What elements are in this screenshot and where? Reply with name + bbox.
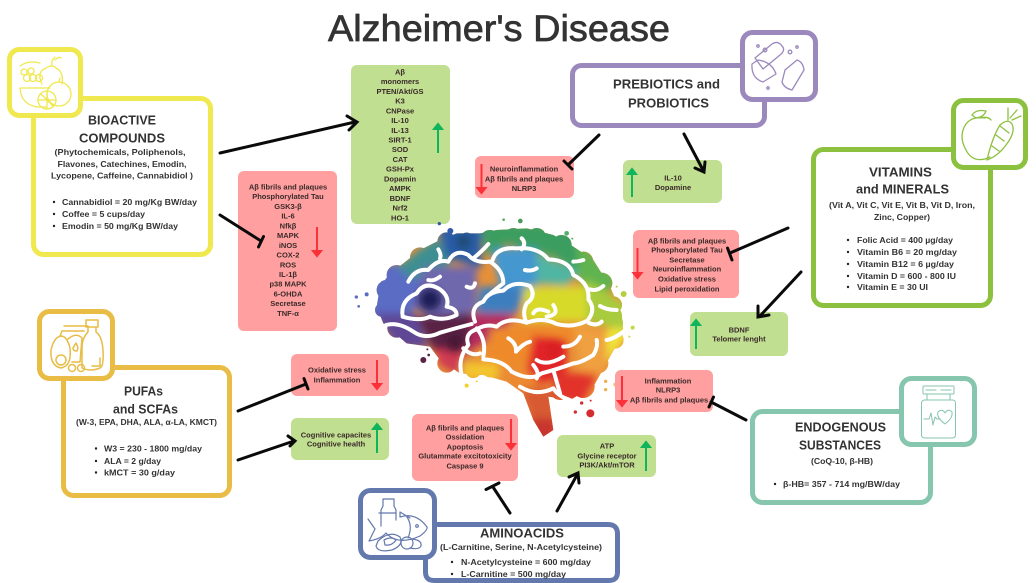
panel: prebiotics downregulated: NLRP3 [512,184,536,193]
panel: downregulated bioactive targets: Nfkβ [280,222,297,230]
arrow: bioactive to green panel [220,116,357,153]
panel: vitamins and minerals: Zinc, Copper) [874,212,930,222]
heading: ENDOGENOUS [795,420,886,434]
brain folds [386,238,623,400]
dosage list [53,197,197,231]
dosage list: N-Acetylcysteine = 600 mg/day [461,557,591,567]
panel: aminoacids downregulated [412,414,518,481]
panel: prebiotics downregulated [475,156,574,198]
heading: VITAMINS [869,164,932,180]
panel: upregulated bioactive targets: BDNF [390,194,411,203]
panel: downregulated bioactive targets: MAPK [277,231,300,240]
panel: aminoacids upregulated: PI3K/Akt/mTOR [579,460,635,470]
dosage list: Vitamin B12 = 6 µg/day [857,259,954,269]
panel: PUFAs downregulated [291,354,389,396]
subtitle: (CoQ-10, β-HB) [811,456,873,466]
icon: supplement jar [902,378,974,444]
panel: downregulated bioactive targets: IL-1β [279,270,297,279]
panel: downregulated bioactive targets: iNOS [279,241,297,250]
panel: vitamins downregulated [633,230,739,298]
arrow: down [634,248,642,278]
panel: PUFAs upregulated: Cognitive capacites [301,430,371,440]
panel: bioactive compounds [10,50,210,254]
panel: upregulated bioactive targets: monomers [381,77,419,86]
inhibition: endogenous to red panel [709,397,746,420]
panel: upregulated bioactive targets: SIRT-1 [388,136,412,144]
dosage list: Emodin = 50 mg/Kg BW/day [62,221,178,231]
panel: downregulated bioactive targets: 6-OHDA [274,290,303,298]
arrow: down [478,164,486,193]
arrow: up [373,424,381,453]
arrow: prebiotics to green panel [684,134,705,172]
panel: downregulated bioactive targets: p38 MAPK [269,280,307,288]
dosage list: Cannabidiol = 20 mg/Kg BW/day [62,197,197,207]
icon: fruit basket [10,50,80,116]
dosage list: Coffee = 5 cups/day [62,209,145,219]
panel: bioactive compounds: Lycopene, Caffeine, Cannabidiol ) [51,170,193,180]
panel: downregulated bioactive targets: IL-6 [281,212,295,220]
panel: prebiotics and probiotics [572,32,816,126]
arrow: down [618,376,626,406]
panel: bioactive compounds: Flavones, Catechines, Emodin, [58,159,186,169]
panel: downregulated bioactive targets: ROS [280,260,296,270]
panel: PUFAs upregulated [291,418,389,460]
panel: vitamins downregulated: Lipid peroxidation [654,284,720,294]
arrow: PUFAs to green panel [238,436,295,460]
dosage list [847,235,957,292]
panel: upregulated bioactive targets: Aβ [395,68,405,76]
panel: downregulated bioactive targets [238,171,337,331]
panel: aminoacids upregulated [557,435,656,477]
arrow: up [692,320,700,349]
panel: aminoacids downregulated: Apoptosis [447,442,483,452]
panel: upregulated bioactive targets: IL-10 [391,116,409,125]
panel: prebiotics downregulated: Aβ fibrils and plaques [485,174,563,184]
panel: endogenous downregulated: Inflammation [645,376,692,386]
dosage list: kMCT = 30 g/day [104,468,175,478]
inhibition: vitamins to red panel [728,228,788,260]
panel: vitamins upregulated: BDNF [729,326,750,334]
panel: upregulated bioactive targets: PTEN/Akt/GS [376,87,424,96]
dosage list: β-HB= 357 - 714 mg/BW/day [783,479,900,489]
arrow: down [373,360,381,389]
panel: PUFAs and SCFAs: and SCFAs [113,402,178,416]
arrow: up [642,442,650,471]
dosage list [95,444,202,478]
heading: BIOACTIVE [88,112,156,128]
panel: prebiotics upregulated: Dopamine [655,183,691,192]
arrow: down [507,419,515,449]
arrow: vitamins to green panel [758,272,801,317]
dosage list [451,557,591,579]
panel: endogenous substances: SUBSTANCES [799,438,881,452]
dosage list: W3 = 230 - 1800 mg/day [104,444,202,454]
panel: aminoacids downregulated: Aβ fibrils and plaques [426,424,504,432]
panel: vitamins downregulated: Aβ fibrils and plaques [648,236,726,246]
panel: aminoacids downregulated: Caspase 9 [446,462,484,470]
panel: vitamins downregulated: Oxidative stress [658,274,716,284]
panel: prebiotics and probiotics: PROBIOTICS [628,96,709,110]
subtitle: (Phytochemicals, Poliphenols, [54,147,186,157]
arrow: down [313,227,321,256]
inhibition: aminoacids to red panel [486,483,510,513]
panel: vitamins downregulated: Phosphorylated Tau [651,246,723,254]
panel: endogenous downregulated: NLRP3 [656,386,680,394]
panel: PUFAs upregulated: Cognitive health [307,440,366,448]
paint splatter [355,218,635,417]
arrow: up [628,169,636,197]
arrow: aminoacids to green panel [557,473,579,511]
panel: upregulated bioactive targets: AMPK [389,184,412,193]
panel: PUFAs downregulated: Oxidative stress [308,366,366,374]
dosage list: ALA = 2 g/day [104,456,161,466]
subtitle: (Vit A, Vit C, Vit E, Vit B, Vit D, Iron, [829,200,975,210]
panel: PUFAs downregulated: Inflammation [314,376,361,384]
panel: endogenous downregulated [615,370,713,412]
inhibition: PUFAs to red panel [238,378,308,411]
panel: downregulated bioactive targets: Phosphorylated Tau [252,192,324,201]
heading: AMINOACIDS [480,526,564,540]
panel: upregulated bioactive targets: CAT [393,155,408,164]
subtitle: (W-3, EPA, DHA, ALA, α-LA, KMCT) [76,417,217,427]
dosage list: Folic Acid = 400 µg/day [857,235,953,245]
inhibition: bioactive to red panel [220,215,264,247]
icon: avocado and bottles [40,312,112,378]
panel: upregulated bioactive targets: Nrf2 [392,204,408,212]
dosage list: L-Carnitine = 500 mg/day [461,569,566,579]
panel: aminoacids [360,490,618,580]
icon: fish, bottle and meat [360,490,434,558]
panel: endogenous downregulated: Aβ fibrils and plaques [630,396,708,404]
panel: downregulated bioactive targets: GSK3-β [274,202,302,211]
panel: vitamins upregulated: Telomer lenght [712,334,766,344]
panel: aminoacids downregulated: Glutammate excitotoxicity [418,452,513,460]
heading: PUFAs [124,384,163,398]
dosage list: Vitamin E = 30 UI [857,282,928,292]
panel: upregulated bioactive targets: Dopamin [384,174,416,184]
panel: upregulated bioactive targets: GSH-Px [386,164,415,174]
panel: downregulated bioactive targets: Aβ fibrils and plaques [249,182,327,192]
panel: upregulated bioactive targets: K3 [395,96,405,106]
title: Alzheimer's Disease [328,8,670,49]
panel: vitamins downregulated: Secretase [669,256,705,264]
panel: endogenous substances [752,378,974,502]
panel: upregulated bioactive targets: CNPase [386,106,414,116]
panel: bioactive compounds: COMPOUNDS [79,130,165,146]
panel: upregulated bioactive targets [351,65,450,224]
panel: vitamins downregulated: Neuroinflammation [653,264,722,274]
panel: aminoacids upregulated: ATP [600,442,614,450]
brain illustration [355,218,635,443]
panel: upregulated bioactive targets: IL-13 [391,126,409,135]
panel: prebiotics upregulated [623,160,722,203]
panel: vitamins and minerals [814,100,1026,306]
panel: prebiotics upregulated: IL-10 [664,174,682,182]
panel: vitamins and minerals: and MINERALS [856,182,949,196]
panel: PUFAs and SCFAs [40,312,230,496]
subtitle: (L-Carnitine, Serine, N-Acetylcysteine) [440,542,602,552]
panel: downregulated bioactive targets: TNF-α [277,309,299,318]
panel: aminoacids upregulated: Glycine receptor [577,452,637,460]
dosage list: Vitamin B6 = 20 mg/day [857,247,957,257]
icon: capsules and pills [742,32,816,100]
panel: downregulated bioactive targets: Secretase [270,299,306,308]
panel: upregulated bioactive targets: HO-1 [391,214,409,222]
panel: downregulated bioactive targets: COX-2 [277,250,299,260]
panel: upregulated bioactive targets: SOD [392,145,409,154]
arrow: up [434,124,442,153]
panel: vitamins upregulated [690,312,788,356]
icon: apple and carrot [954,100,1026,168]
inhibition: prebiotics to red panel [564,135,599,169]
heading: PREBIOTICS and [613,76,720,92]
panel: aminoacids downregulated: Ossidation [446,432,485,442]
dosage list: Vitamin D = 600 - 800 IU [857,271,956,281]
panel: prebiotics downregulated: Neuroinflammation [490,164,559,174]
